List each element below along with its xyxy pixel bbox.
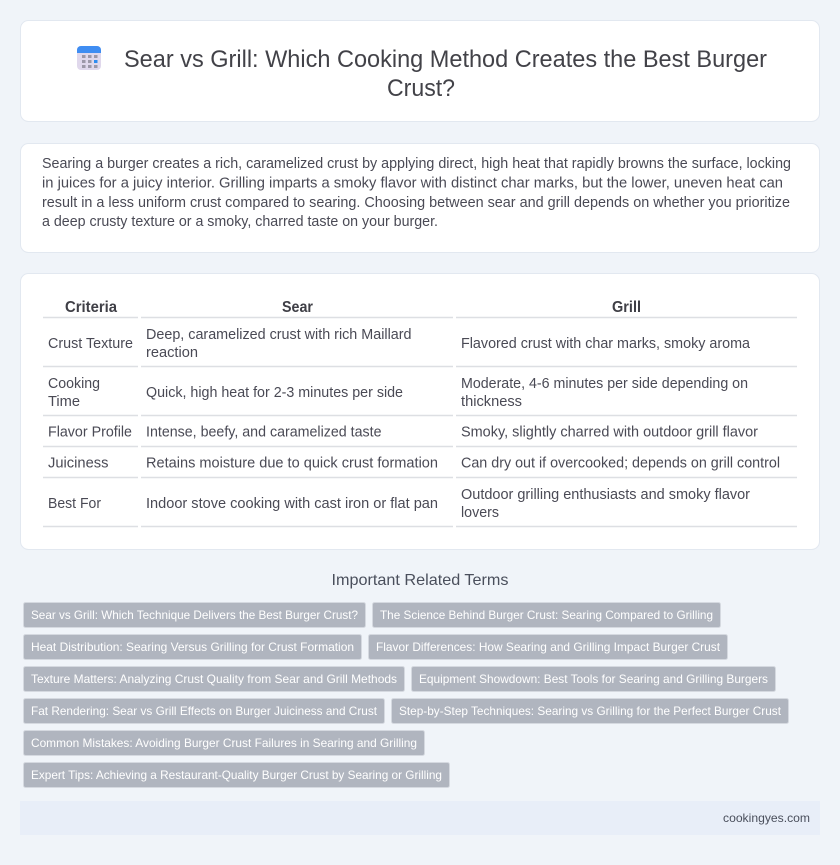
text block: intro: in juices for a juicy interior. Grilling imparts a smoky flavor with distinct char marks, but the lower, uneven heat can [42,176,783,192]
icon: calendar [77,46,101,70]
tag [392,698,788,724]
tag [372,602,720,628]
row: best for: Outdoor grilling enthusiasts and smoky flavor [461,487,750,503]
row: cooking time: Cooking [48,376,100,392]
tag [412,666,776,692]
row: cooking time: Quick, high heat for 2-3 minutes per side [146,385,403,401]
text block: intro [42,156,791,230]
tag [368,634,728,660]
heading: important related terms: Important Related Terms [332,572,508,589]
text block: intro: Searing a burger creates a rich, caramelized crust by applying direct, high heat that rapidly browns the surface, locking [42,156,791,172]
tag: Flavor Differences: How Searing and Grilling Impact Burger Crust [376,640,721,654]
tag [24,602,366,628]
tag: Equipment Showdown: Best Tools for Searing and Grilling Burgers [419,672,768,686]
title: Crust? [387,75,455,102]
tag: Step-by-Step Techniques: Searing vs Grilling for the Perfect Burger Crust [399,704,782,718]
footer [20,801,820,835]
title [124,46,767,102]
row: crust texture: reaction [146,345,198,361]
row: cooking time [48,376,748,410]
tag [24,634,362,660]
tag: Expert Tips: Achieving a Restaurant-Quality Burger Crust by Searing or Grilling [31,768,442,782]
tag: Heat Distribution: Searing Versus Grilling for Crust Formation [31,640,354,654]
table header: Grill [612,299,641,316]
tag group: related terms [24,602,788,788]
row: crust texture: Crust Texture [48,336,133,352]
tag: Common Mistakes: Avoiding Burger Crust Failures in Searing and Grilling [31,736,417,750]
row: flavor profile: Smoky, slightly charred with outdoor grill flavor [461,424,758,440]
footer: cookingyes.com [723,811,810,825]
row: crust texture [48,327,750,361]
text block: intro: result in a less uniform crust compared to searing. Choosing between sear and grill depends on whether you prioritize [42,195,790,211]
row: juiciness: Juiciness [48,456,108,472]
tag: Sear vs Grill: Which Technique Delivers the Best Burger Crust? [31,608,358,622]
tag: Fat Rendering: Sear vs Grill Effects on Burger Juiciness and Crust [31,704,378,718]
row: best for [48,487,750,521]
row: crust texture: Deep, caramelized crust with rich Maillard [146,327,412,343]
row: juiciness [48,456,780,472]
tag [24,762,450,788]
row: flavor profile: Intense, beefy, and caramelized taste [146,424,382,440]
row: crust texture: Flavored crust with char marks, smoky aroma [461,336,750,352]
tag [24,666,404,692]
tag [24,698,384,724]
row: best for: Indoor stove cooking with cast iron or flat pan [146,496,438,512]
row: flavor profile [48,424,758,440]
row: flavor profile: Flavor Profile [48,424,132,440]
row: cooking time: thickness [461,394,522,410]
table header: Criteria [65,299,117,316]
row: best for: Best For [48,496,101,512]
table header: Sear [282,299,313,316]
tag: Texture Matters: Analyzing Crust Quality from Sear and Grill Methods [31,672,397,686]
row: cooking time: Time [48,394,80,410]
tag [24,730,424,756]
table header [65,299,641,316]
panel: title card [20,20,820,122]
panel: comparison table [20,274,820,550]
row: juiciness: Can dry out if overcooked; depends on grill control [461,456,780,472]
title: Sear vs Grill: Which Cooking Method Creates the Best Burger [124,46,767,73]
row: cooking time: Moderate, 4-6 minutes per side depending on [461,376,748,392]
row: best for: lovers [461,505,499,521]
tag: The Science Behind Burger Crust: Searing Compared to Grilling [380,608,713,622]
panel: introduction [20,144,820,252]
row: juiciness: Retains moisture due to quick crust formation [146,456,438,472]
text block: intro: a deep crusty texture or a smoky, charred taste on your burger. [42,214,438,230]
